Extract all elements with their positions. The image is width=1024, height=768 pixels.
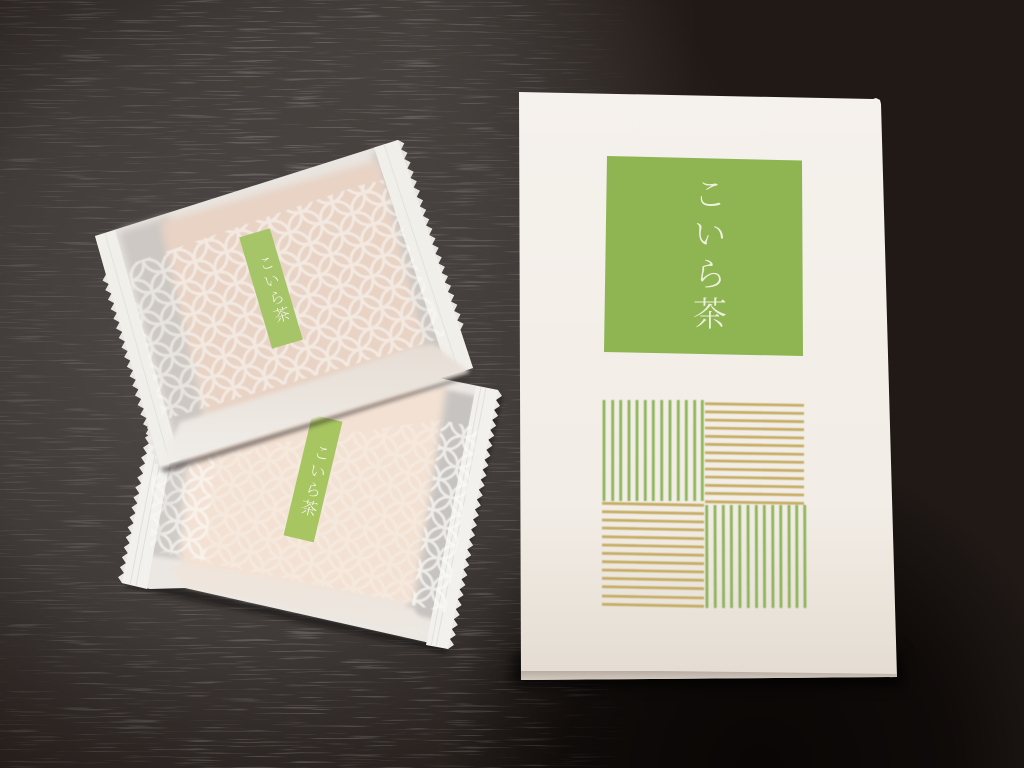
shippo lace pattern, strong at right xyxy=(412,420,478,612)
top-left green vertical stripes xyxy=(604,400,702,501)
striped four-square emblem xyxy=(602,400,805,608)
upper wrapped sweet packet xyxy=(95,140,476,473)
packet shadow xyxy=(124,395,502,653)
lower wrapped sweet packet xyxy=(118,324,502,653)
packet wrapper with zigzag ends xyxy=(95,140,473,466)
green label with brush lettering: こいら茶 xyxy=(295,442,332,520)
title brush lettering: こいら茶 xyxy=(688,176,726,336)
box front fold xyxy=(521,671,897,680)
shippo lace pattern xyxy=(127,180,445,420)
translucent wrapper zone at right xyxy=(405,388,476,620)
shippo lace pattern, faint over pastry xyxy=(155,420,440,605)
green label with brush lettering xyxy=(239,228,303,349)
pastry seen through wrapper xyxy=(160,160,425,424)
shippo lace pattern, strong at left xyxy=(150,456,215,560)
seal crease lines xyxy=(105,144,459,463)
bottom folded flap xyxy=(170,566,428,640)
bottom-right green vertical stripes xyxy=(707,505,805,608)
bottom-left gold horizontal stripes xyxy=(602,503,704,606)
seal crease lines xyxy=(130,326,486,647)
packet wrapper with zigzag ends xyxy=(118,324,502,649)
end seal bands xyxy=(95,140,473,466)
box shadow xyxy=(510,650,904,686)
translucent grey wrapper areas xyxy=(118,148,450,458)
pastry seen through wrapper xyxy=(180,385,447,606)
top-right gold horizontal stripes xyxy=(705,404,804,503)
box lid xyxy=(519,92,897,680)
paper box xyxy=(510,92,904,686)
green title square xyxy=(604,156,803,356)
end seal bands xyxy=(122,324,498,649)
green label with brush lettering xyxy=(284,415,342,542)
translucent wrapper zone at left xyxy=(146,455,195,560)
packet shadow xyxy=(160,372,476,473)
fine light grain streaks xyxy=(0,0,600,768)
bottom folded flap xyxy=(160,344,470,466)
green label with brush lettering: こいら茶 xyxy=(254,253,292,327)
